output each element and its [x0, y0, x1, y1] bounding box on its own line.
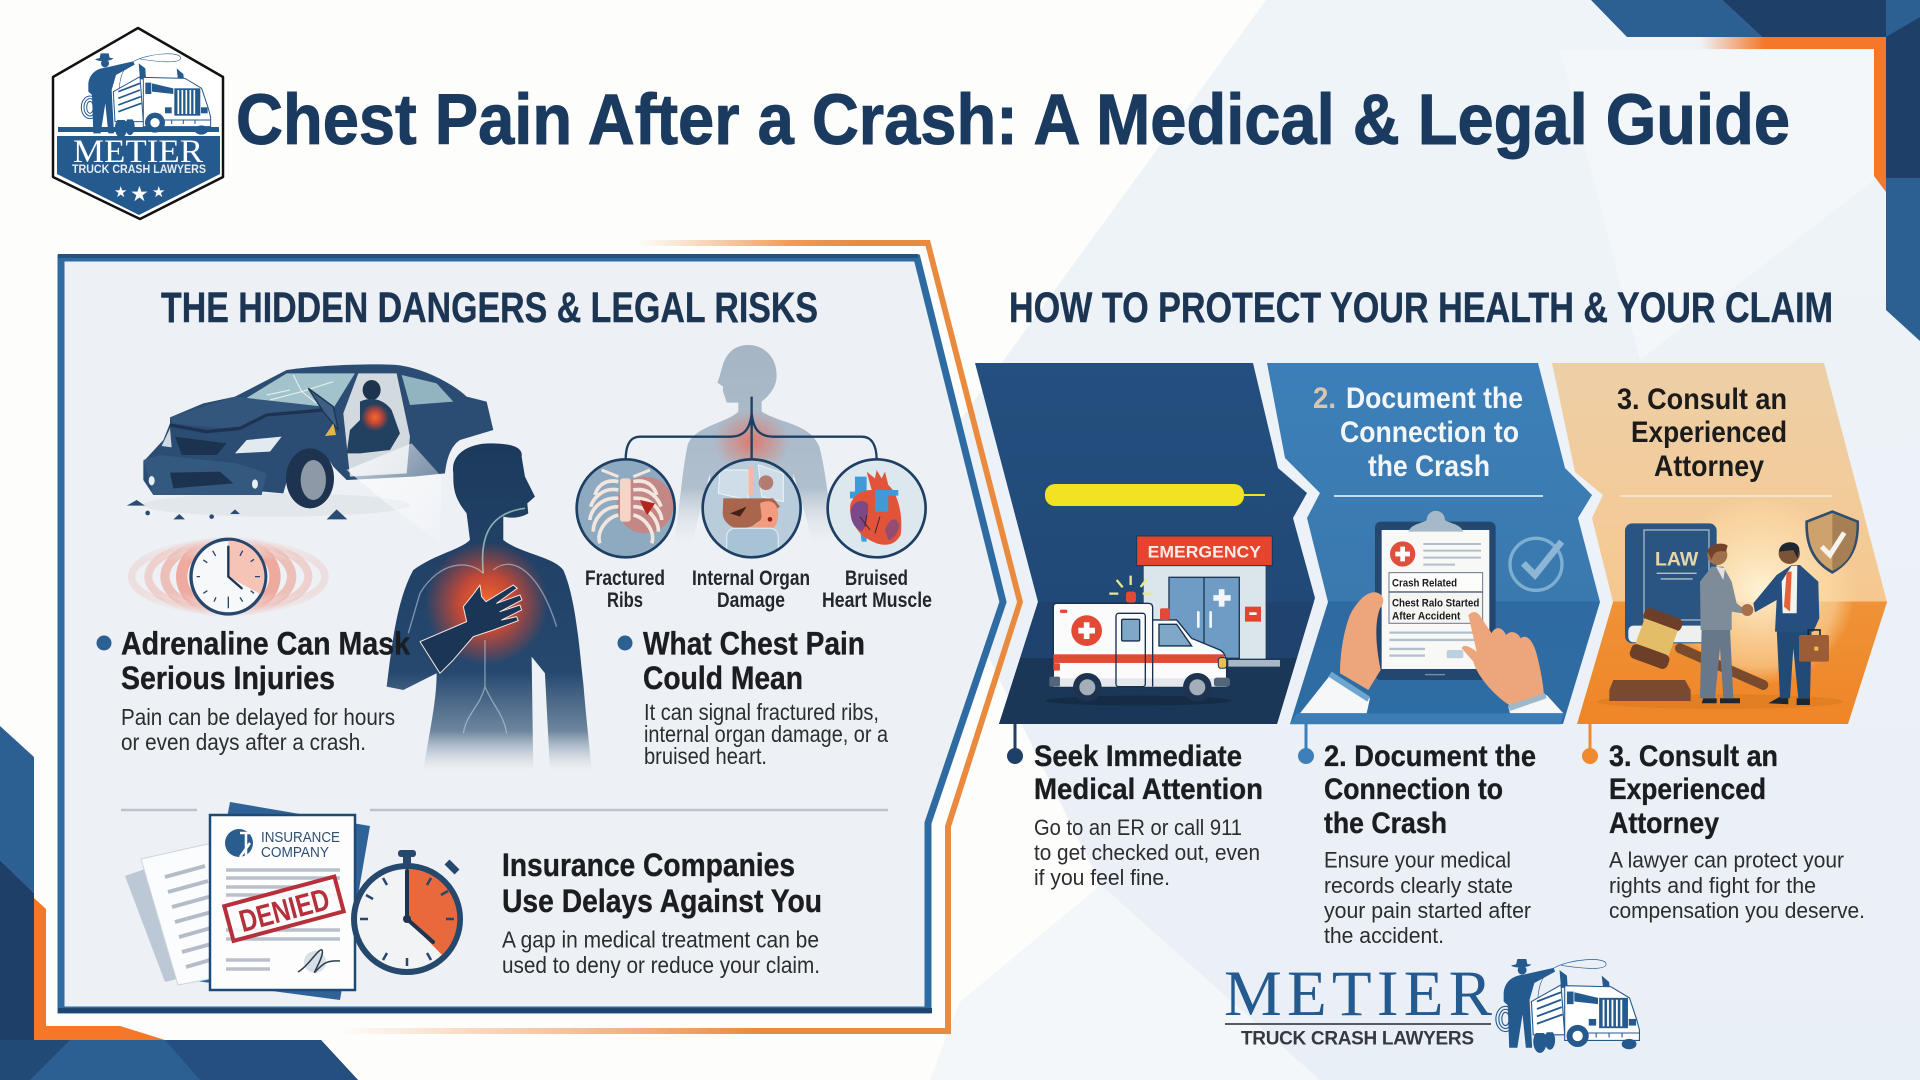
heading: hidden dangers: THE HIDDEN DANGERS & LEGAL RISKS: [161, 284, 818, 332]
step 1 text: [1007, 724, 1263, 890]
captions: injury types: Internal Organ: [692, 567, 810, 590]
step 2 text: records clearly state: [1324, 873, 1513, 898]
title: Chest Pain After a Crash: A Medical & Legal Guide: [236, 81, 1790, 160]
text block: insurance delays: A gap in medical treatment can be: [502, 926, 819, 952]
panel heading: Document the: [1346, 382, 1523, 415]
right man: [1753, 542, 1819, 705]
logo badge: ★: [152, 184, 165, 201]
text block: adrenaline: Adrenaline Can Mask: [121, 626, 410, 662]
panel: step 3 attorney: [1552, 363, 1887, 724]
step 3 text: [1582, 724, 1865, 923]
illustration: hands and clipboard: Chest Ralo Started: [1392, 598, 1479, 610]
text block: adrenaline: or even days after a crash.: [121, 729, 366, 755]
illustration: ambulance at emergency room: EMERGENCY: [1148, 542, 1261, 561]
panel heading: Connection to: [1340, 416, 1519, 449]
captions: injury types: Bruised: [845, 567, 908, 590]
step 3 text: Attorney: [1609, 807, 1719, 840]
text block: adrenaline: [96, 626, 410, 755]
captions: injury types: Damage: [717, 589, 785, 612]
illustration: ambulance at emergency room: [1045, 536, 1280, 706]
captions: injury types: Fractured: [585, 567, 665, 590]
step 1 text: Go to an ER or call 911: [1034, 815, 1242, 840]
step 2 text: your pain started after: [1324, 898, 1531, 923]
illustration: law book, gavel, handshake: [1597, 512, 1858, 709]
step 3 text: rights and fight for the: [1609, 873, 1816, 898]
icon: fractured ribs: [577, 459, 675, 557]
step 3 text: Experienced: [1609, 773, 1766, 806]
text block: what chest pain could mean: bruised heart.: [644, 743, 767, 769]
step 3 text: 3. Consult an: [1609, 740, 1778, 773]
corner decoration: bottom left: [0, 726, 358, 1080]
captions: injury types: [585, 567, 932, 612]
text block: adrenaline: Serious Injuries: [121, 660, 335, 696]
text block: insurance delays: used to deny or reduce your claim.: [502, 952, 820, 978]
panel: step 2 document: [1267, 363, 1600, 724]
logo badge: TRUCK CRASH LAWYERS: [72, 162, 206, 176]
text block: insurance delays: Use Delays Against You: [502, 883, 822, 919]
logo badge: [53, 28, 223, 219]
illustration: law book, gavel, handshake: LAW: [1655, 550, 1699, 571]
panel heading: Experienced: [1631, 416, 1787, 449]
illustration: crashed car: [127, 364, 493, 543]
illustration: body diagram with injury circles: [577, 345, 926, 557]
text block: what chest pain could mean: What Chest Pain: [643, 626, 865, 662]
step 3 text: compensation you deserve.: [1609, 898, 1865, 923]
text block: what chest pain could mean: Could Mean: [643, 660, 803, 696]
footer logo: [1224, 958, 1639, 1053]
step 1 text: to get checked out, even: [1034, 840, 1260, 865]
illustration: stopwatch: [354, 850, 460, 972]
step 2 text: the Crash: [1324, 807, 1447, 840]
icon: internal organs: [703, 459, 801, 557]
corner decoration: top right: [1591, 0, 1920, 341]
illustration: denied insurance letter: [125, 802, 370, 1000]
panel heading: Attorney: [1654, 450, 1764, 483]
text block: adrenaline: Pain can be delayed for hours: [121, 704, 395, 730]
icon: bruised heart: [828, 459, 926, 557]
panel heading: [1313, 382, 1523, 483]
footer logo: TRUCK CRASH LAWYERS: [1241, 1028, 1474, 1050]
step 2 text: Ensure your medical: [1324, 848, 1511, 872]
footer truck and cowboy: [1496, 959, 1639, 1053]
step 3 text: A lawyer can protect your: [1609, 848, 1844, 872]
icon: shield: [1807, 512, 1858, 572]
illustration: hands and clipboard: After Accident: [1392, 611, 1461, 623]
illustration: hands and clipboard: Crash Related: [1392, 578, 1457, 590]
yellow placeholder bar: [1045, 484, 1265, 506]
step 2 text: [1298, 724, 1536, 948]
illustration: delayed pain clock: [132, 539, 325, 614]
logo badge: METIER: [73, 134, 203, 170]
step 2 text: the accident.: [1324, 923, 1444, 948]
logo truck and cowboy: [81, 53, 211, 138]
logo badge: ★: [114, 184, 127, 201]
captions: injury types: Ribs: [607, 589, 643, 612]
step 1 text: if you feel fine.: [1034, 865, 1170, 890]
text block: what chest pain could mean: [618, 626, 888, 769]
text block: what chest pain could mean: It can signal fractured ribs,: [644, 699, 879, 725]
panel heading: the Crash: [1368, 450, 1490, 483]
left man: [1700, 544, 1745, 703]
illustration: hands and clipboard: [1290, 511, 1564, 724]
stamp: denied: DENIED: [235, 881, 333, 939]
captions: injury types: Heart Muscle: [822, 589, 932, 612]
panel: step 1 emergency: [970, 363, 1320, 728]
step 1 text: Medical Attention: [1034, 773, 1263, 806]
illustration: person holding chest: [387, 443, 592, 770]
step 2 text: Connection to: [1324, 773, 1503, 806]
text block: what chest pain could mean: internal organ damage, or a: [644, 721, 888, 747]
text block: insurance delays: Insurance Companies: [502, 847, 795, 883]
illustration: denied insurance letter: INSURANCE: [261, 829, 340, 846]
panel heading: 3. Consult an: [1617, 383, 1787, 416]
step 2 text: 2. Document the: [1324, 740, 1536, 773]
footer logo: METIER: [1224, 958, 1493, 1030]
text block: insurance delays: [502, 847, 822, 978]
step 1 text: Seek Immediate: [1034, 740, 1242, 773]
logo badge: ★: [130, 183, 149, 206]
left panel: hidden dangers and legal risks: [58, 240, 1023, 1034]
illustration: denied insurance letter: COMPANY: [261, 844, 329, 861]
panel heading: 2.: [1313, 382, 1336, 415]
panel heading: [1617, 383, 1787, 483]
